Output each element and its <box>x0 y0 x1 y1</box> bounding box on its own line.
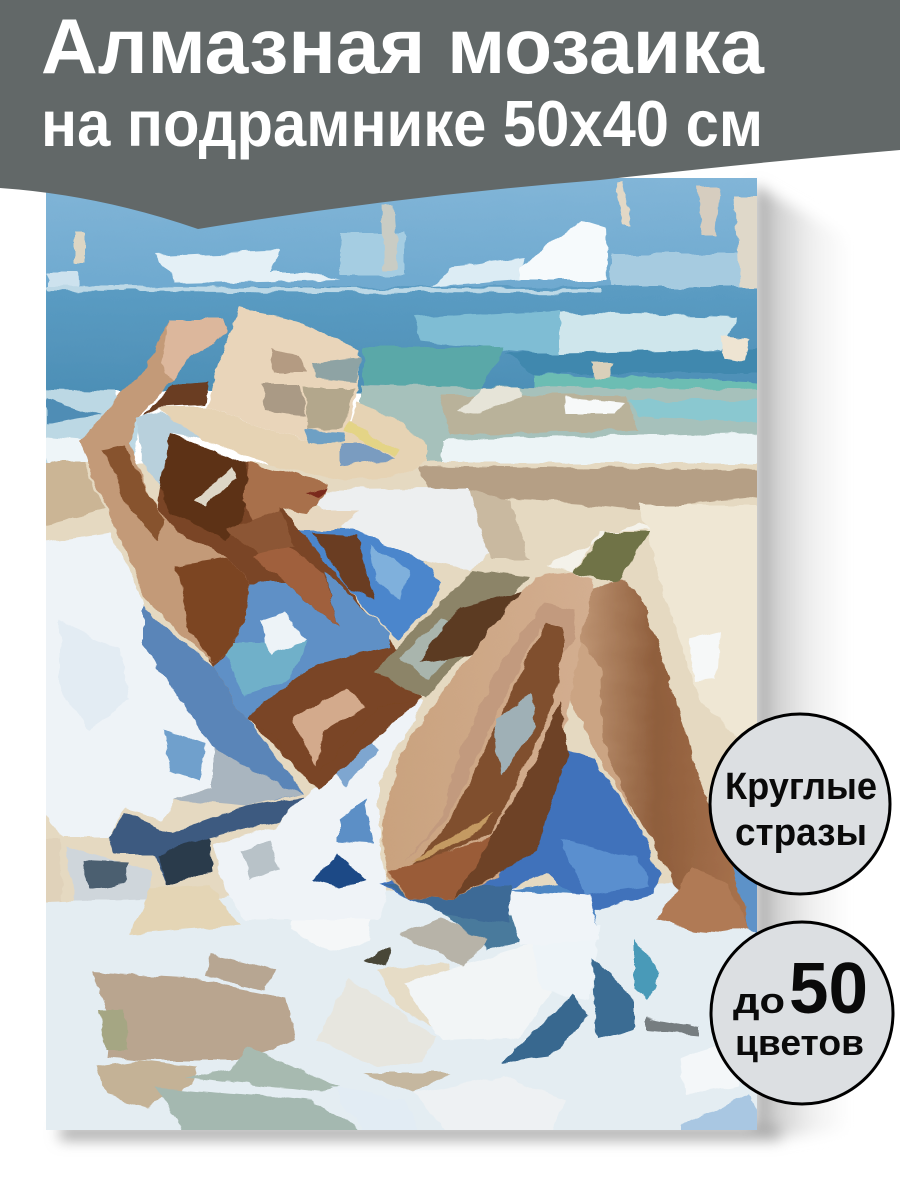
woman: straw hat <box>157 307 427 480</box>
foam and shallows <box>46 384 757 465</box>
badge: round rhinestones: Круглые <box>725 766 877 808</box>
woman: near leg <box>380 572 593 900</box>
header banner <box>0 0 900 229</box>
sand near towel <box>30 840 62 905</box>
book <box>373 522 650 697</box>
title line 2: на подрамнике 50х40 см <box>41 87 763 160</box>
blue towel under legs <box>380 740 660 945</box>
pillow blue stripe <box>143 607 303 807</box>
title line 1: Алмазная мозаика <box>41 2 765 90</box>
white and blue towel <box>213 700 423 920</box>
woman: hair and face <box>160 433 327 553</box>
badge: up to 50 colours: до <box>733 980 785 1021</box>
sand <box>30 463 780 903</box>
dark fabric <box>66 797 303 905</box>
canvas side shadow <box>60 185 850 1140</box>
badge: up to 50 colours: 50 <box>789 949 868 1029</box>
chest <box>253 543 339 627</box>
bottom paint strokes <box>46 866 757 1130</box>
woman: far leg <box>563 580 750 933</box>
woman: torso base <box>150 463 423 790</box>
badge: up to 50 colours <box>711 922 893 1104</box>
badge: round rhinestones <box>710 714 890 894</box>
painting: woman reading on the beach <box>30 170 780 1145</box>
sea <box>30 286 780 393</box>
badge: up to 50 colours: цветов <box>735 1022 864 1063</box>
bikini top <box>213 570 389 717</box>
white pillow <box>46 532 215 838</box>
woman: arm <box>80 320 249 663</box>
mid midriff <box>248 688 366 790</box>
badge: round rhinestones: стразы <box>735 812 867 854</box>
blue cloth behind shoulder <box>293 530 443 640</box>
sky <box>46 178 757 290</box>
